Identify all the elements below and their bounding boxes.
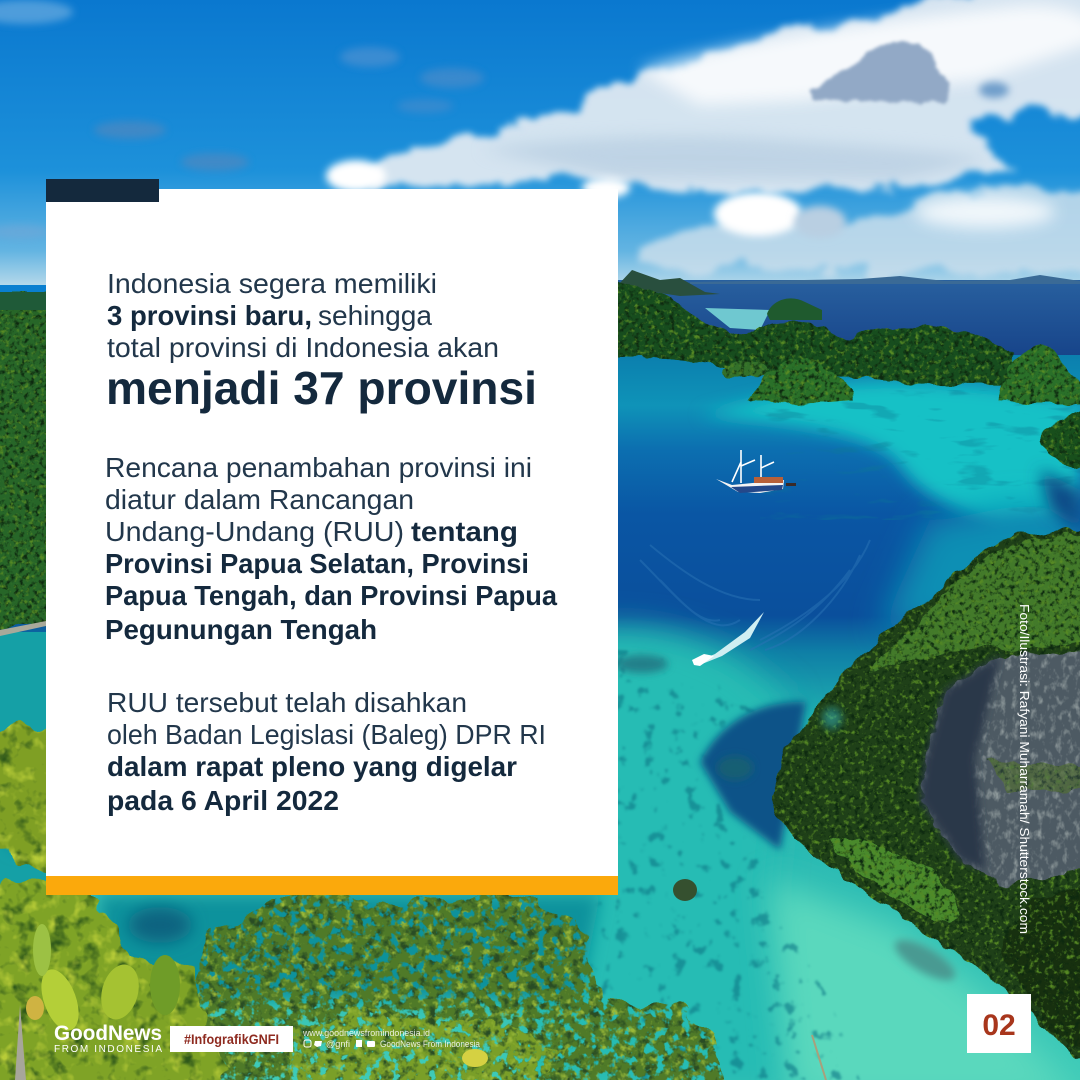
text block: RUU xyxy=(107,687,546,816)
heading: menjadi 37 provinsi: menjadi 37 provinsi xyxy=(106,362,537,414)
left foliage xyxy=(0,722,60,880)
foreground foliage xyxy=(0,880,826,1080)
orange bar xyxy=(46,876,618,895)
social links: @gnfi xyxy=(326,1039,350,1049)
right cliff island xyxy=(772,525,1080,1080)
text block: rencana: Undang-Undang (RUU) xyxy=(105,516,404,547)
text block: rencana: Rencana penambahan provinsi ini xyxy=(105,452,532,483)
main sea xyxy=(0,355,1080,1080)
text block: intro: sehingga xyxy=(318,300,432,331)
island: right edge xyxy=(1040,405,1080,474)
speedboat and wake xyxy=(692,612,764,666)
text block: intro: 3 provinsi baru, xyxy=(107,300,312,331)
text block: rencana: Papua Tengah, dan Provinsi Papua xyxy=(105,580,557,611)
clouds xyxy=(0,0,1080,272)
social links xyxy=(302,1028,480,1049)
dark tab xyxy=(46,179,159,202)
card background xyxy=(46,189,618,876)
island: islet left xyxy=(723,360,770,377)
social links: GoodNews From Indonesia xyxy=(380,1039,480,1049)
panel: main text card xyxy=(46,179,618,895)
ship xyxy=(716,450,796,493)
hashtag badge xyxy=(170,1026,293,1052)
island: main chain xyxy=(600,281,1018,385)
turquoise shallows xyxy=(0,383,1080,1080)
hashtag badge: #InfografikGNFI xyxy=(184,1031,279,1047)
island: small rear xyxy=(767,298,822,320)
photo credit: Foto/Ilustrasi: Rafyani Muharramah/ Shutterstock.com xyxy=(1017,604,1032,934)
logo: GoodNews From Indonesia: GoodNews xyxy=(54,1022,162,1045)
text block: rencana: tentang xyxy=(411,516,518,547)
text block: rencana: diatur dalam Rancangan xyxy=(105,484,414,515)
icon: social row xyxy=(304,1040,375,1047)
ripples xyxy=(640,540,870,650)
logo: GoodNews From Indonesia: FROM INDONESIA xyxy=(54,1044,162,1055)
text block: rencana xyxy=(105,452,557,645)
text block: RUU: RUU tersebut telah disahkan xyxy=(107,687,467,718)
text block: rencana: Provinsi Papua Selatan, Provinsi xyxy=(105,548,529,579)
shallow strip behind islands xyxy=(705,308,770,330)
text block: intro: total provinsi di Indonesia akan xyxy=(107,332,499,363)
logo: GoodNews From Indonesia xyxy=(54,1022,162,1055)
island: far headland xyxy=(618,270,720,296)
social links: www.goodnewsfromindonesia.id xyxy=(302,1028,430,1038)
text block: RUU: oleh Badan Legislasi (Baleg) DPR RI xyxy=(107,719,546,750)
sand edge xyxy=(0,621,46,636)
island: central islet xyxy=(750,360,855,404)
text block: RUU: pada 6 April 2022 xyxy=(107,785,339,816)
left top strip xyxy=(0,292,60,310)
text block: intro: Indonesia segera memiliki xyxy=(107,268,437,299)
text block: rencana: Pegunungan Tengah xyxy=(105,614,377,645)
page number: 02 xyxy=(982,1009,1016,1042)
left edge island xyxy=(0,292,60,632)
page number xyxy=(967,994,1031,1053)
sky xyxy=(0,0,1080,285)
text block: intro xyxy=(107,268,499,363)
distant hills xyxy=(690,275,1080,284)
island: right islet xyxy=(998,345,1080,404)
far sea xyxy=(618,280,1080,370)
text block: RUU: dalam rapat pleno yang digelar xyxy=(107,751,517,782)
